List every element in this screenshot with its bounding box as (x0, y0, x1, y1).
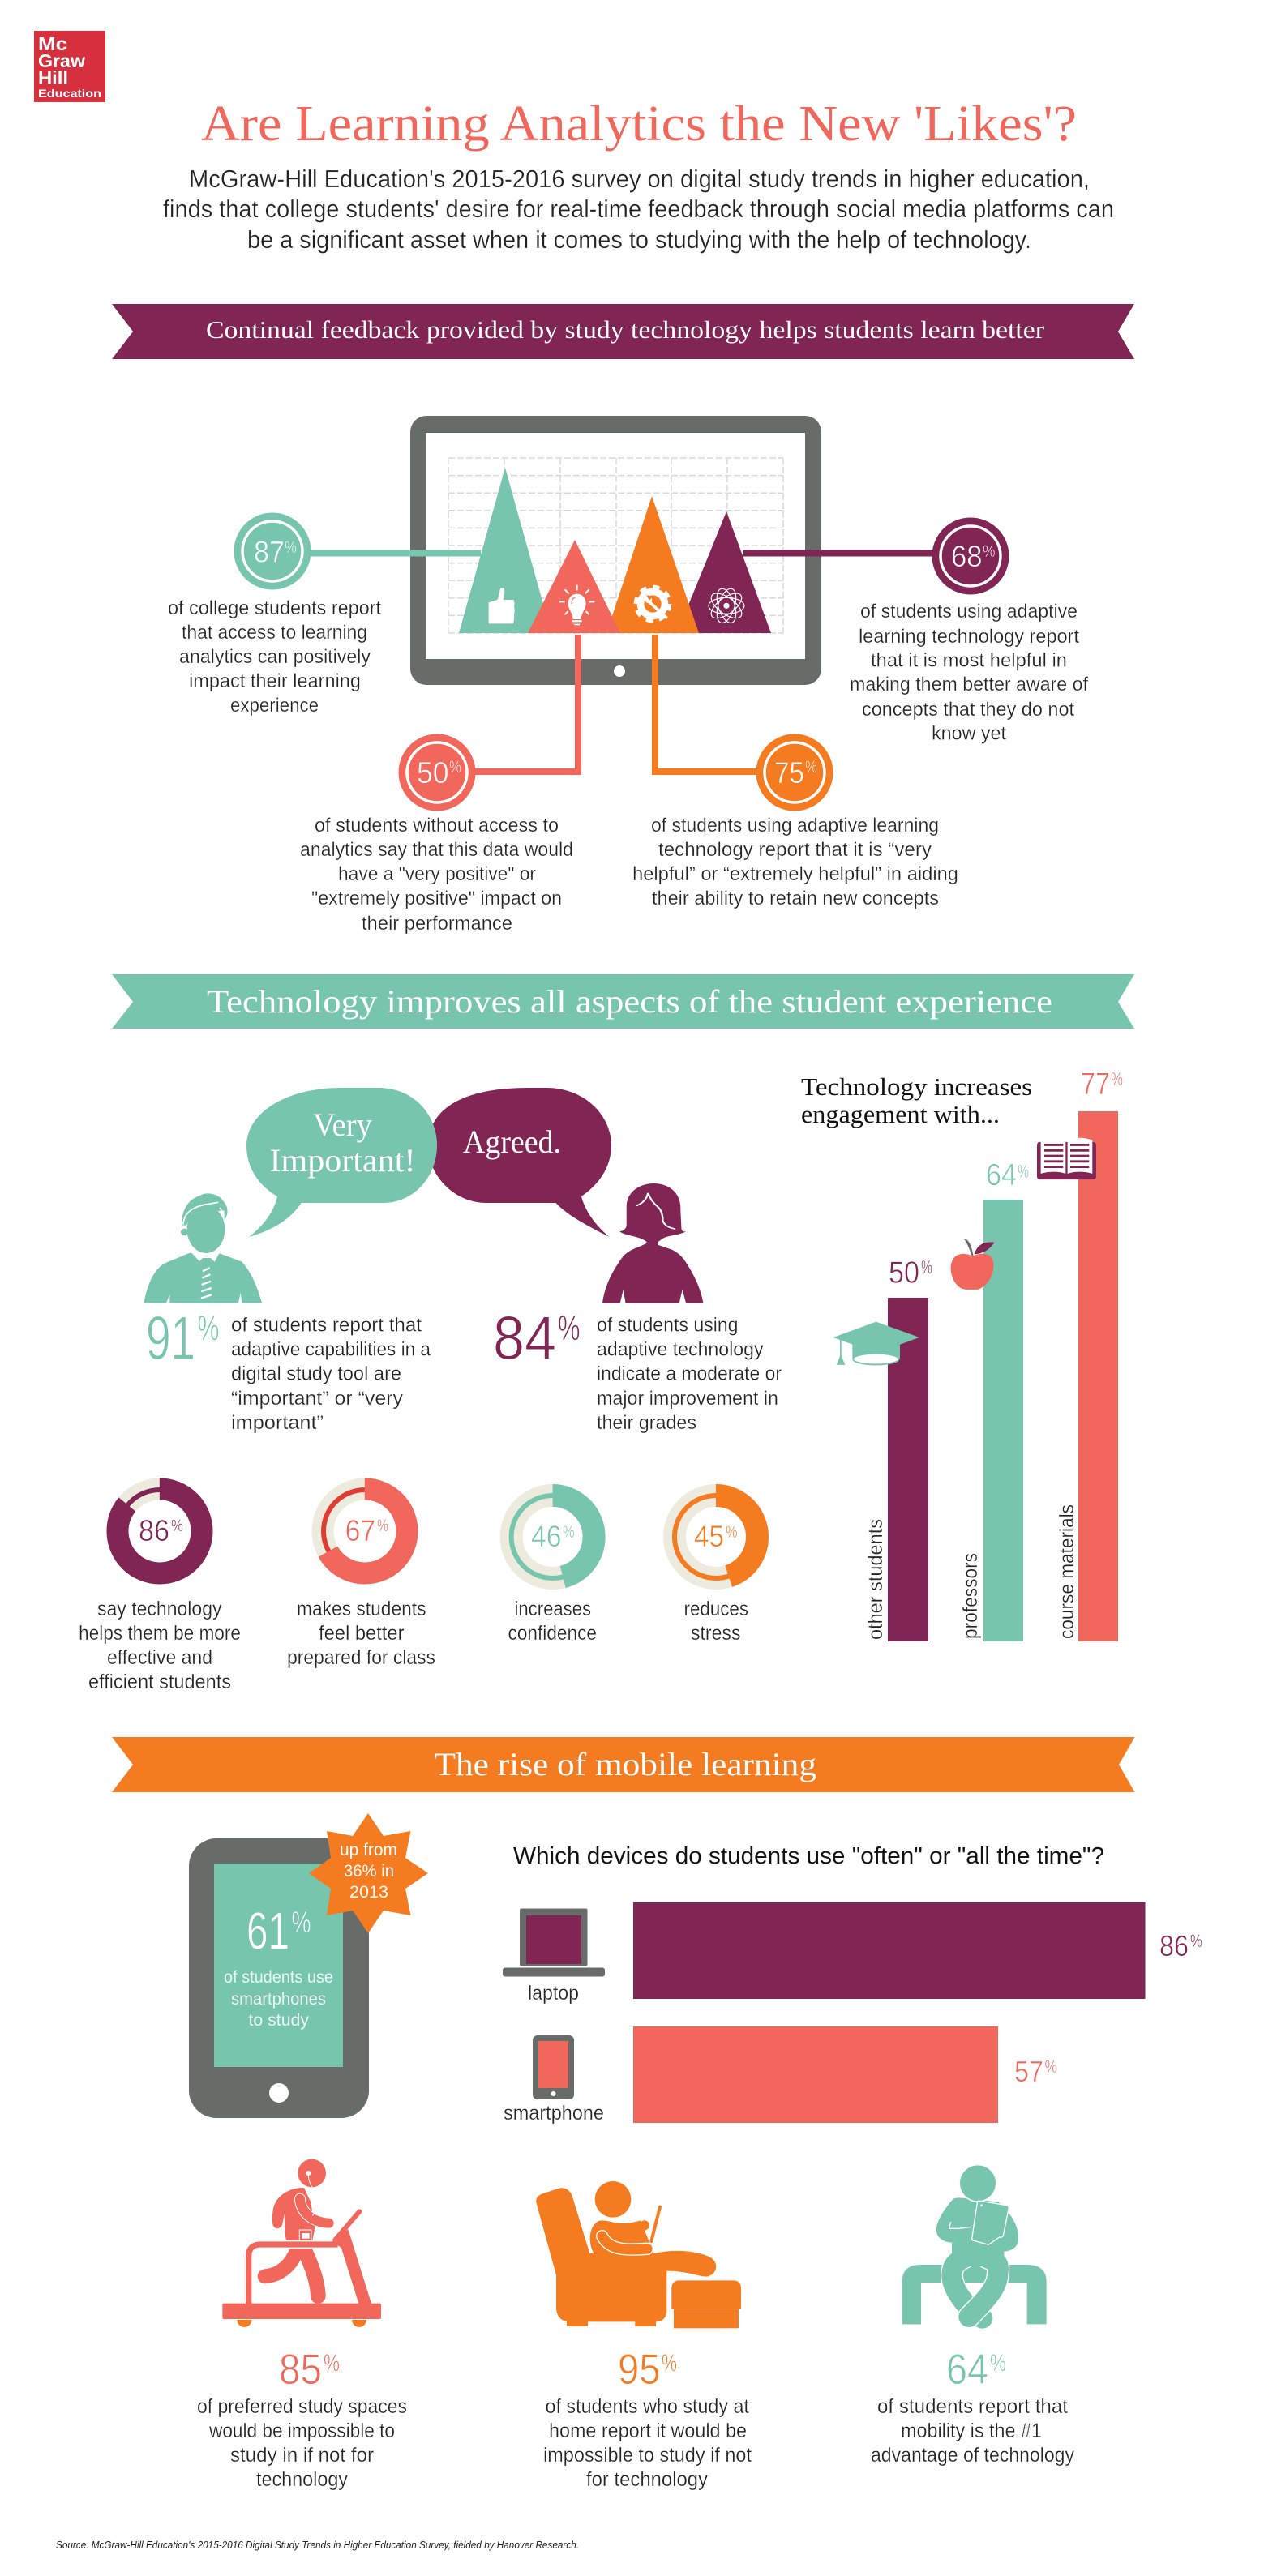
donut: 45% (675, 1496, 757, 1578)
phone stat (224, 1902, 333, 2030)
icon: apple (951, 1239, 995, 1290)
logo: McGraw-Hill Education (34, 31, 105, 102)
logo: McGraw-Hill Education: Mc (38, 33, 67, 54)
stat text: 75%: helpful” or “extremely helpful” in aiding (632, 863, 958, 885)
donut label: 67%: prepared for class (287, 1646, 435, 1669)
label: laptop: laptop (528, 1982, 579, 2005)
stat: 64%: advantage of technology (871, 2444, 1074, 2467)
starburst callout: 36% in (344, 1862, 394, 1881)
bar: other students 50%: other students (864, 1519, 887, 1640)
stat: 91%: % (198, 1308, 219, 1348)
bar: laptop 86%: % (1190, 1931, 1202, 1951)
chart heading: Technology increases (801, 1072, 1032, 1101)
bar: other students 50%: 50 (889, 1256, 919, 1290)
intro text: McGraw-Hill Education's 2015-2016 survey on digital study trends in higher education, (189, 165, 1090, 193)
stat: 64% (871, 2346, 1074, 2467)
donut label: 67%: makes students (297, 1598, 426, 1620)
stat: 85%: technology (256, 2468, 348, 2491)
tablet device (410, 416, 821, 685)
banner: rise of mobile learning (112, 1737, 1135, 1792)
stat: 91%: digital study tool are (231, 1363, 401, 1385)
stat circle: 68% (932, 517, 1009, 595)
connector lines (308, 550, 938, 772)
stat circle: 68%: 68 (951, 540, 983, 573)
icon: person on treadmill (222, 2159, 381, 2327)
donut label: 45% (684, 1598, 748, 1645)
stat text: 50%: their performance (362, 913, 512, 935)
icon: atom (707, 586, 746, 625)
donut: 45%: % (726, 1523, 738, 1542)
stat text: 68%: concepts that they do not (862, 699, 1074, 721)
icon: light bulb (559, 585, 594, 625)
stat text: 87%: analytics can positively (179, 646, 371, 668)
donut label: 67%: feel better (319, 1622, 404, 1645)
stat: 95%: impossible to study if not (543, 2444, 752, 2467)
stat circle: 87%: 87 (254, 535, 285, 569)
phone stat: 61 (246, 1902, 289, 1960)
stat circle: 75%: % (805, 758, 817, 777)
chart heading (801, 1072, 1032, 1128)
stat text: 75%: their ability to retain new concepts (652, 888, 939, 909)
stat text: 50%: "extremely positive" impact on (311, 888, 562, 909)
stat text: 87%: experience (230, 695, 319, 717)
stat: 91%: of students report that (231, 1315, 422, 1337)
intro text (163, 165, 1114, 254)
stat: 85%: would be impossible to (208, 2420, 395, 2442)
bar: other students 50%: % (921, 1256, 932, 1277)
donut: 67%: 67 (345, 1514, 375, 1547)
bar: smartphone 57%: % (1044, 2056, 1057, 2077)
stat text: 68%: learning technology report (859, 626, 1079, 648)
stat text: 68%: that it is most helpful in (871, 650, 1067, 671)
phone stat: of students use (224, 1968, 333, 1987)
donut label: 86%: helps them be more (79, 1622, 241, 1645)
stat: 84%: major improvement in (597, 1388, 778, 1410)
bar: laptop 86% (633, 1902, 1202, 1999)
bar: course materials 77%: course materials (1056, 1504, 1078, 1639)
stat circle: 87%: % (285, 538, 297, 557)
panel: donut stats (79, 1489, 757, 1693)
icon: laptop (503, 1908, 605, 1976)
bar: course materials 77%: % (1111, 1068, 1123, 1089)
chart question: Which devices do students use "often" or "all the time"? (513, 1843, 1104, 1869)
donut label: 67% (287, 1598, 435, 1669)
stat text: 68% (850, 601, 1088, 744)
label: smartphone: smartphone (504, 2102, 604, 2125)
stat circle: 68%: % (983, 542, 996, 561)
donut: 86% (118, 1489, 202, 1573)
bar: professors 64%: professors (959, 1553, 982, 1639)
stat: 85%: % (324, 2350, 340, 2377)
stat: 91%: 91 (146, 1304, 195, 1373)
donut label: 86%: say technology (97, 1598, 222, 1620)
banner: continual feedback: Continual feedback provided by study technology helps students learn better (206, 315, 1045, 344)
speech bubble: Very Important (246, 1088, 437, 1237)
stat: 95%: 95 (618, 2346, 660, 2394)
chart heading: engagement with... (801, 1100, 1000, 1128)
stat: 91%: adaptive capabilities in a (231, 1339, 431, 1361)
donut: 45%: 45 (694, 1520, 724, 1553)
stat circle: 50%: 50 (417, 756, 449, 789)
icon: man with tie (144, 1193, 262, 1303)
source note: Source: McGraw-Hill Education's 2015-2016 Digital Study Trends in Higher Education Survey, fielded by Hanover Research. (56, 2539, 579, 2551)
logo: McGraw-Hill Education: Hill (38, 67, 68, 88)
bar: professors 64%: 64 (986, 1158, 1017, 1192)
stat circle: 50%: % (449, 758, 461, 777)
stat text: 50% (300, 815, 573, 935)
speech bubble: Agreed: Agreed. (463, 1123, 561, 1160)
intro text: finds that college students' desire for real-time feedback through social media platforms can (163, 195, 1114, 223)
donut: 67%: % (377, 1517, 388, 1535)
bar: professors 64% (959, 1158, 1029, 1641)
icon: open book (1037, 1138, 1096, 1179)
stat: 84%: their grades (597, 1412, 696, 1434)
icon: gear and wrench (636, 587, 670, 621)
stat text: 68%: making them better aware of (850, 674, 1088, 695)
stat: 85%: study in if not for (230, 2444, 374, 2467)
stat: 64%: % (990, 2350, 1006, 2377)
icons on bars (833, 1138, 1096, 1365)
stat: 64%: 64 (946, 2346, 988, 2394)
stat: 64%: of students report that (877, 2395, 1068, 2418)
starburst callout: up from (340, 1841, 397, 1859)
stat: 95% (543, 2346, 752, 2491)
phone stat: smartphones (231, 1990, 326, 2009)
donut label: 45%: stress (691, 1622, 741, 1645)
stat: 84%: % (558, 1308, 581, 1348)
stat: 85% (197, 2346, 407, 2491)
donut: 46%: 46 (531, 1520, 561, 1553)
stat: 84% (493, 1304, 782, 1434)
stat: 91%: “important” or “very (231, 1388, 403, 1410)
donut: 86%: % (171, 1517, 183, 1535)
stat: 95%: for technology (586, 2468, 708, 2491)
stat text: 68%: know yet (932, 723, 1006, 744)
stat: 84%: indicate a moderate or (597, 1363, 782, 1385)
donut label: 46%: increases (514, 1598, 591, 1620)
logo: McGraw-Hill Education: Education (38, 87, 101, 100)
stat text: 75% (632, 815, 958, 909)
stat text: 50%: analytics say that this data would (300, 839, 573, 861)
stat: 91% (146, 1304, 431, 1434)
donut label: 46%: confidence (508, 1622, 597, 1645)
bar: other students 50% (864, 1256, 932, 1641)
stat: 95%: home report it would be (549, 2420, 747, 2442)
stat text: 87%: of college students report (168, 597, 381, 619)
panel: tablet feedback diagram (168, 416, 1088, 935)
stat text: 68%: of students using adaptive (860, 601, 1078, 623)
stat: 64%: mobility is the #1 (901, 2420, 1042, 2442)
triangle chart (459, 468, 771, 633)
bar: smartphone 57%: 57 (1014, 2055, 1043, 2088)
donut: 86%: 86 (139, 1514, 169, 1547)
stat text: 50%: of students without access to (315, 815, 559, 837)
panel: speech bubbles and people (144, 1088, 782, 1434)
panel: engagement bar chart (801, 1068, 1123, 1641)
icon: small smartphone (533, 2035, 574, 2099)
panel: devices bar chart (503, 1843, 1202, 2125)
speech bubble: Agreed (428, 1088, 611, 1237)
speech bubble: Very Important: Very (313, 1106, 372, 1143)
donut label: 86% (79, 1598, 241, 1693)
stat text: 87% (168, 597, 381, 717)
stat: 95%: of students who study at (545, 2395, 749, 2418)
stat text: 87%: impact their learning (189, 670, 361, 692)
icon: person in armchair (536, 2181, 741, 2328)
stat circle: 75% (756, 734, 833, 811)
stat text: 50%: have a "very positive" or (338, 863, 536, 885)
logo: McGraw-Hill Education: Graw (38, 50, 85, 71)
starburst callout (309, 1813, 428, 1933)
banner: continual feedback (112, 304, 1134, 359)
bar: course materials 77% (1056, 1068, 1123, 1641)
stat: 95%: % (662, 2350, 677, 2377)
stat: 84%: of students using (597, 1315, 738, 1337)
bar: professors 64%: % (1018, 1161, 1029, 1182)
banner: technology improves (112, 974, 1134, 1029)
stat text: 75%: technology report that it is “very (658, 839, 932, 861)
stat circle: 87% (234, 512, 311, 590)
bar: course materials 77%: 77 (1081, 1068, 1110, 1102)
stat text: 87%: that access to learning (182, 622, 367, 644)
donut label: 46% (508, 1598, 597, 1645)
stat: 85%: 85 (279, 2346, 322, 2394)
panel: study spaces stats (197, 2159, 1074, 2491)
donut label: 86%: efficient students (88, 1671, 231, 1693)
donut label: 86%: effective and (107, 1646, 212, 1669)
phone stat: % (292, 1906, 311, 1940)
title: Are Learning Analytics the New 'Likes'? (201, 96, 1077, 152)
icons on triangles (489, 585, 746, 625)
banner: technology improves: Technology improves all aspects of the student experience (207, 983, 1052, 1020)
panel: smartphone 61% (189, 1813, 428, 2118)
donut label: 45%: reduces (684, 1598, 748, 1620)
donut: 46% (512, 1496, 594, 1578)
intro text: be a significant asset when it comes to studying with the help of technology. (247, 225, 1031, 254)
stat circle: 75%: 75 (774, 756, 804, 789)
icon: graduation cap (833, 1322, 919, 1365)
donut: 67% (323, 1489, 407, 1573)
stat circle: 50% (399, 734, 475, 811)
stat: 85%: of preferred study spaces (197, 2395, 407, 2418)
stat text: 75%: of students using adaptive learning (651, 815, 939, 837)
speech bubble: Very Important: Important! (269, 1142, 415, 1179)
phone stat: to study (248, 2011, 310, 2030)
stat: 84%: adaptive technology (597, 1339, 764, 1361)
stat: 84%: 84 (493, 1304, 556, 1373)
icon: person reading on bench (902, 2165, 1047, 2324)
phone body (189, 1838, 369, 2118)
donut: 46%: % (563, 1523, 575, 1542)
banner: rise of mobile learning: The rise of mobile learning (435, 1746, 816, 1782)
bar: smartphone 57% (633, 2026, 1057, 2123)
stat: 91%: important” (231, 1412, 324, 1434)
starburst callout: 2013 (349, 1883, 388, 1902)
icon: thumbs up (489, 588, 515, 623)
bar: laptop 86%: 86 (1159, 1929, 1189, 1962)
icon: woman (602, 1183, 703, 1303)
